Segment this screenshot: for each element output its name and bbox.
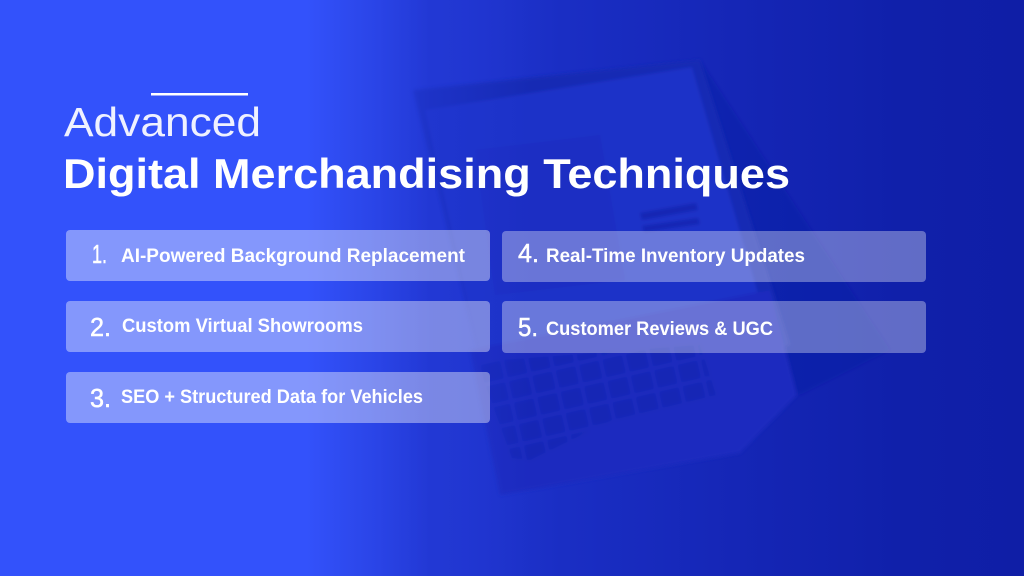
item 1 number: 1.: [92, 239, 107, 269]
item 2 label: Custom Virtual Showrooms: [122, 316, 363, 337]
title line 1: Advanced: [64, 99, 261, 145]
item 4 label: Real-Time Inventory Updates: [546, 246, 805, 267]
laptop background photo: [413, 60, 890, 495]
item 3 number: 3.: [90, 383, 111, 413]
item 3: [66, 372, 490, 423]
item 5 label: Customer Reviews & UGC: [546, 319, 773, 340]
item 5 number: 5.: [518, 312, 538, 342]
item 5 panel: [502, 301, 926, 353]
item 2 panel: [66, 301, 490, 352]
laptop shadow: [700, 60, 890, 395]
item 1 label: AI-Powered Background Replacement: [121, 246, 466, 267]
item 4 panel: [502, 231, 926, 282]
keyboard: [477, 345, 716, 460]
accent line: [151, 93, 248, 96]
item 1 panel: [66, 230, 490, 281]
laptop screen: [425, 67, 760, 360]
laptop base: [470, 290, 797, 495]
laptop screen bezel: [413, 60, 790, 400]
screen content lines: [475, 135, 700, 295]
item 5: [502, 301, 926, 353]
item 1: [66, 230, 490, 281]
item 4: [502, 231, 926, 282]
title: [63, 99, 790, 197]
item 2 number: 2.: [90, 312, 111, 342]
item 2: [66, 301, 490, 352]
item 3 label: SEO + Structured Data for Vehicles: [121, 387, 423, 408]
title line 2: Digital Merchandising Techniques: [63, 150, 790, 197]
item 3 panel: [66, 372, 490, 423]
item 4 number: 4.: [518, 238, 539, 268]
